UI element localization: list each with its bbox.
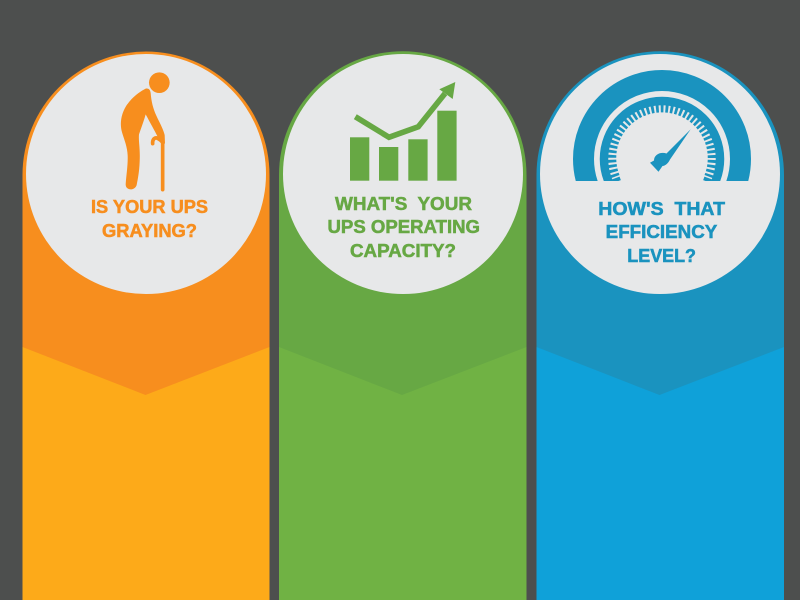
heading: efficiency level — [598, 198, 726, 266]
circle: green — [283, 54, 523, 294]
icon: speedometer gauge — [573, 70, 751, 181]
heading: operating capacity: WHAT'S YOUR — [335, 193, 472, 214]
heading: is your UPS graying — [91, 196, 208, 241]
panel: operating capacity — [279, 51, 526, 600]
heading: operating capacity: UPS OPERATING — [328, 216, 480, 237]
panel: is your UPS graying — [22, 52, 270, 600]
icon: elderly person with cane — [121, 72, 170, 190]
panel top band green — [279, 51, 526, 600]
heading: is your UPS graying: GRAYING? — [102, 220, 197, 241]
panel top band orange — [22, 52, 270, 600]
chevron base blue — [536, 347, 784, 600]
panel: efficiency level — [536, 51, 784, 600]
chevron base orange — [22, 347, 270, 600]
heading: efficiency level: HOW'S THAT — [598, 198, 726, 219]
icon: bar chart with rising arrow — [350, 82, 457, 181]
circle: blue — [540, 54, 780, 294]
heading: operating capacity — [328, 193, 480, 261]
circle: orange — [26, 54, 266, 294]
chevron base green — [279, 347, 526, 600]
heading: efficiency level: EFFICIENCY — [606, 221, 718, 242]
heading: efficiency level: LEVEL? — [627, 245, 696, 266]
panel top band blue — [536, 51, 784, 600]
heading: operating capacity: CAPACITY? — [350, 240, 456, 261]
heading: is your UPS graying: IS YOUR UPS — [91, 196, 208, 217]
